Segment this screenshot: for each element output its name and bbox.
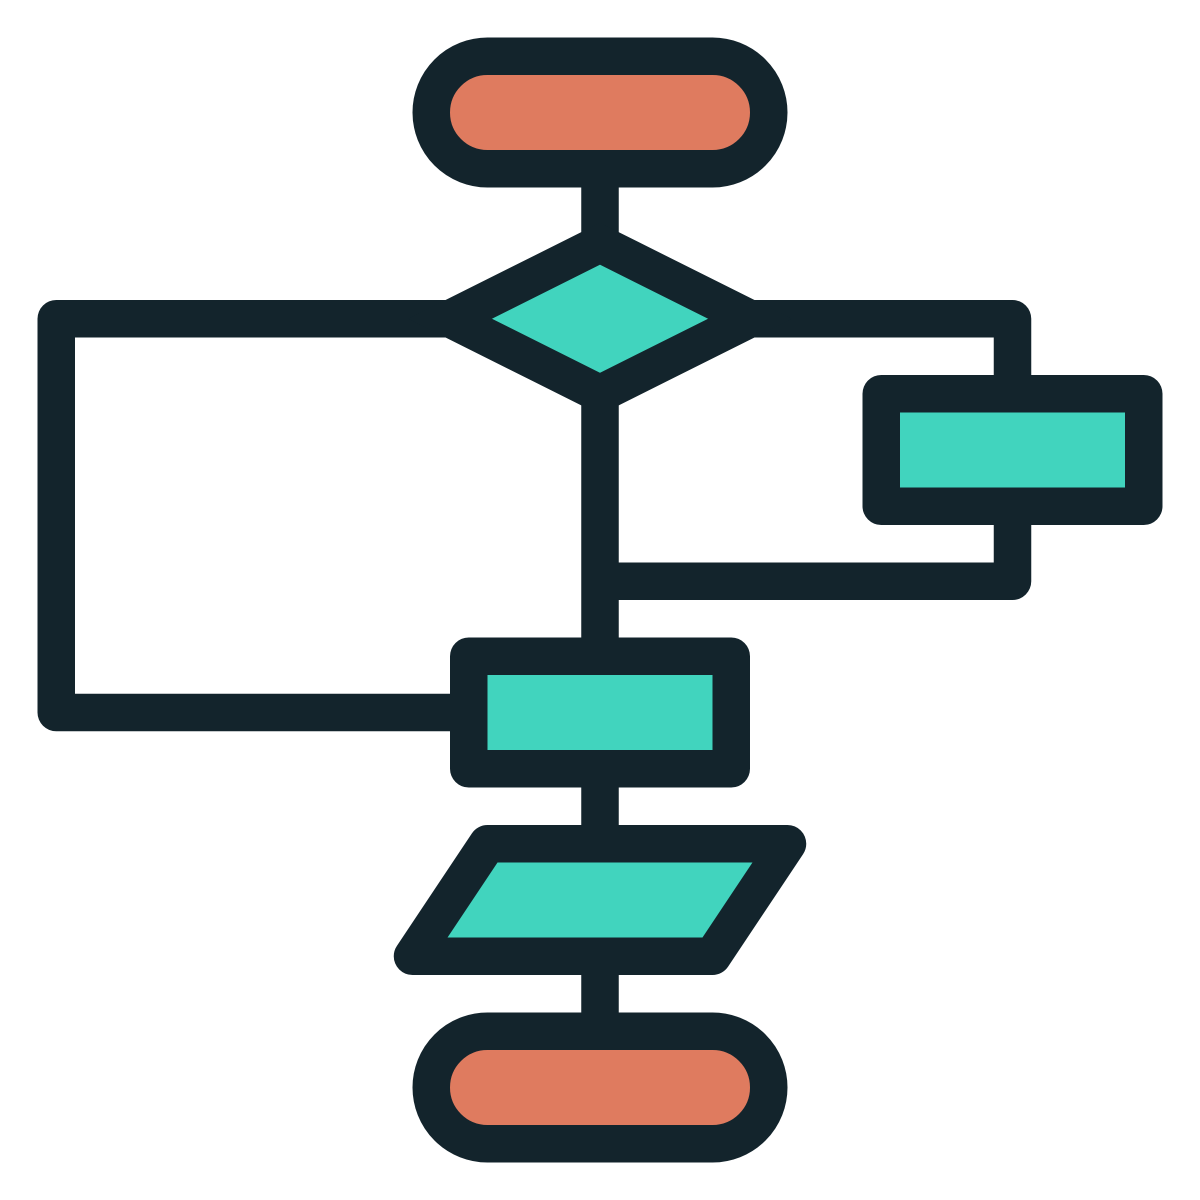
connector: start to decision [581,170,619,250]
connectors [56,170,1012,1030]
main process box [469,656,731,769]
decision diamond [450,244,750,394]
connector: decision to process [581,390,619,650]
data parallelogram [412,844,788,956]
side process box [881,394,1144,506]
connector: decision right branch to side process [740,319,1012,390]
start terminator [431,56,769,169]
connector: process to data [581,770,619,840]
connector: side process back to main line [600,510,1012,581]
end terminator [431,1031,769,1144]
connector: decision left branch to process [56,319,460,712]
connector: data to end [581,960,619,1030]
